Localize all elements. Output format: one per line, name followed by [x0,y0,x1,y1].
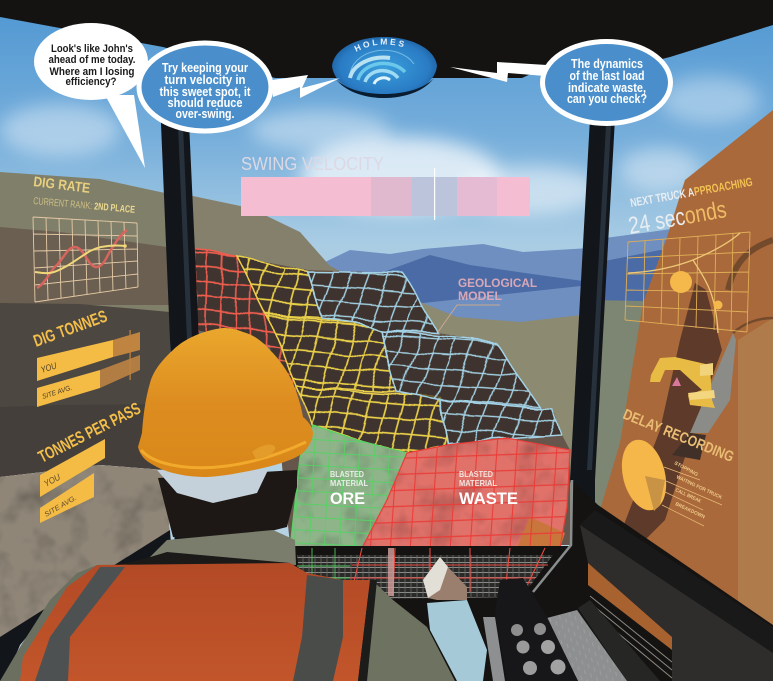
mesh patch: blue upper [308,272,438,333]
dashboard panel [580,525,773,681]
floor plate [547,610,627,681]
lower right cab structure [480,480,773,681]
shirt sleeve [360,580,455,681]
vest collar shadow [97,552,296,570]
lower grille in opening [590,596,672,681]
swing velocity gauge [241,154,530,220]
blasted ore area [290,425,407,548]
delay pie chart [615,435,673,515]
mesh patch: yellow lower [297,387,448,453]
vest stripe left [35,567,125,681]
window frame strip [580,510,773,653]
left pillar [160,100,205,560]
control joystick box [495,578,578,681]
speech bubble: holmes right [450,42,670,124]
delay legend: STOPPING [673,460,699,478]
floor strip [483,617,505,681]
tonnes per pass panel [35,399,144,523]
speech bubble: holmes left: over-swing. [176,107,234,121]
ore label: ORE [330,489,365,508]
icon: excavator [650,357,715,408]
speech bubble: operator: ahead of me today. [48,54,136,66]
waste label: WASTE [459,489,518,508]
dig tonnes heading: DIG TONNES [31,307,110,351]
countdown: 24 seconds [626,196,729,240]
shirt left edge [0,565,97,681]
holmes wordmark: HOLMES [354,38,404,52]
high visibility vest [20,563,370,681]
mountains in windshield [325,244,590,340]
operator hair and head [158,470,297,542]
delay legend: BREAKDOWN [674,501,706,520]
speech bubble: operator: Where am I losing [50,66,134,78]
mesh patch: blue middle [380,330,540,408]
cab pillars and frame [0,100,616,681]
control grille below the windshield [190,546,590,681]
speech bubble: operator: Look's like John's [51,43,133,55]
speech bubble: holmes right: indicate waste, [568,81,646,95]
speech bubble: holmes left: turn velocity in [164,73,246,87]
mesh patch: yellow upper [238,257,322,318]
speech bubble: holmes left: this sweet spot, it [160,85,251,99]
speech bubble: holmes right: The dynamics [571,57,643,71]
waste label [459,470,518,508]
current rank text: CURRENT RANK: 2ND PLACE [33,196,136,216]
rock face behind the geological mesh [195,249,570,545]
speech bubble: operator: efficiency? [66,76,117,88]
geological model label: GEOLOGICAL [458,276,537,290]
hand [423,557,467,600]
tan hill right of the mesh [420,302,590,530]
waste label: BLASTED [459,470,493,479]
mesh patch: blue lower [440,400,562,443]
delay legend: WAITING FOR TRUCK [675,474,723,501]
delay legend [662,460,723,526]
geological model mesh [195,249,562,453]
hard hat [138,328,313,477]
ore label: BLASTED [330,470,364,479]
light bar [388,548,394,596]
grey cliff left of the mesh [188,195,348,300]
next truck panel [625,175,754,333]
helmet liner [157,470,268,503]
speech bubble: operator [34,23,148,168]
vest stripe right [293,575,343,681]
mesh patch: red [195,249,297,420]
truck approach chart [625,232,750,333]
delay legend: CALL BREAK [674,487,702,505]
lower left sill [0,530,172,681]
haul truck body [590,110,773,660]
speech bubble: holmes left: Try keeping your [162,61,248,75]
next truck heading: NEXT TRUCK APPROACHING [629,175,754,210]
speech bubble: holmes left [139,43,340,131]
opening with truck view [588,563,672,650]
vest edge shadow [358,580,377,681]
truck grey stripe [690,333,736,433]
dig tonnes panel [31,307,140,407]
operator [0,328,487,681]
glove finger [423,557,448,598]
dig rate panel [33,173,138,302]
ore label: MATERIAL [330,479,368,488]
truck shadow [620,283,722,545]
mesh patch: yellow middle [267,315,397,392]
cab roof [0,0,773,78]
geological model label [438,276,537,332]
forearm cuff [427,600,487,681]
delay recording heading: DELAY RECORDING [621,406,736,466]
delay recording panel [615,406,736,526]
ore label [330,470,368,508]
holmes device [332,37,437,98]
operator collar [147,530,296,565]
door sill [578,600,660,681]
dig rate line chart [33,217,138,302]
speech bubble: holmes right: of the last load [570,69,644,83]
right pillar [570,100,616,525]
dig rate heading: DIG RATE [33,173,91,196]
site average bar: SITE AVG. [41,385,73,401]
you bar: YOU [40,360,58,375]
speech bubble: holmes left: should reduce [168,96,243,110]
left side window hillside [0,172,175,645]
blasted waste area [362,438,570,548]
swing velocity heading: SWING VELOCITY [241,154,384,174]
site average bar: SITE AVG. [44,495,78,519]
tonnes per pass heading: TONNES PER PASS [35,399,144,467]
holmes rings [350,50,414,84]
dark frame base [480,480,773,681]
speech bubble: holmes right: can you check? [567,92,647,106]
geological model label: MODEL [458,289,502,303]
frame highlight [533,480,572,592]
you bar: YOU [42,472,62,489]
waste label: MATERIAL [459,479,497,488]
right side window landscape [590,225,700,530]
